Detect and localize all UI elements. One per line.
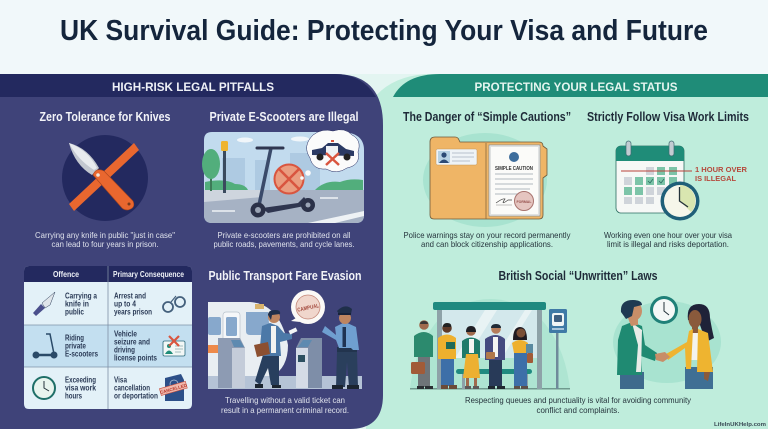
icon: crossed-out knife xyxy=(62,135,148,221)
scooter xyxy=(250,148,315,218)
row: visa hours: or deportation xyxy=(114,392,158,400)
row: knife xyxy=(33,292,185,316)
table header: Primary Consequence xyxy=(113,270,184,279)
row: knife: years prison xyxy=(114,308,152,316)
row: e-scooters: Riding xyxy=(65,334,84,342)
callout: one hour over: IS ILLEGAL xyxy=(695,174,736,183)
table header: Offence xyxy=(53,270,79,279)
row: e-scooters: Vehicle xyxy=(114,330,137,338)
section header: protecting your legal status xyxy=(393,74,768,97)
text: social laws xyxy=(465,395,692,415)
row: knife: up to 4 xyxy=(114,300,136,308)
person: passenger with bag xyxy=(254,310,297,388)
text: fare evasion: result in a permanent criminal record. xyxy=(221,405,349,415)
icon: wall clock xyxy=(650,296,678,324)
heading: fare evasion: Public Transport Fare Evasion xyxy=(208,269,362,283)
row: e-scooters: E-scooters xyxy=(65,350,98,358)
text: e-scooters xyxy=(214,230,354,249)
person 3 xyxy=(462,326,480,389)
text: visa limits: limit is illegal and risks deportation. xyxy=(607,239,729,249)
row: e-scooters: seizure and xyxy=(114,338,150,346)
heading: simple cautions: The Danger of “Simple Cautions” xyxy=(403,110,571,124)
person 1 xyxy=(411,320,433,389)
person: man in green jacket xyxy=(617,300,657,389)
row: visa hours: CANCELLED xyxy=(159,382,188,395)
illustration: caution folder: SIMPLE CAUTION xyxy=(495,166,533,172)
heading: e-scooters: Private E-Scooters are Illegal xyxy=(210,110,358,124)
panel: high-risk legal pitfalls xyxy=(0,74,383,429)
callout: one hour over: 1 HOUR OVER xyxy=(695,165,748,174)
row: e-scooters: license points xyxy=(114,354,157,362)
speech bubble: stamp xyxy=(291,290,325,324)
row: visa hours: Visa xyxy=(114,376,127,384)
text: fare evasion: Travelling without a valid ticket can xyxy=(225,395,345,405)
text: simple cautions xyxy=(404,230,571,249)
person 2 xyxy=(438,323,457,389)
row: visa hours: visa work xyxy=(65,384,96,392)
panel: protecting your legal status xyxy=(366,74,768,429)
text: social laws: conflict and complaints. xyxy=(536,405,620,415)
heading: unwritten laws: British Social “Unwritten” Laws xyxy=(498,269,658,283)
row: visa hours: cancellation xyxy=(114,384,150,392)
text: knives: can lead to four years in prison. xyxy=(52,239,158,249)
row: knife: Carrying a xyxy=(65,292,97,300)
section header: high-risk legal pitfalls xyxy=(0,74,376,97)
section header: protecting your legal status: PROTECTING YOUR LEGAL STATUS xyxy=(474,82,678,94)
watermark: LifeInUKHelp.com xyxy=(714,422,766,428)
text: e-scooters: Private e-scooters are prohibited on all xyxy=(218,230,351,240)
text: visa limits: Working even one hour over your visa xyxy=(604,230,732,240)
row: e-scooters xyxy=(32,330,185,362)
row: visa hours: Exceeding xyxy=(65,376,96,384)
table: offence and consequence xyxy=(24,266,192,409)
illustration: caution folder xyxy=(423,133,547,227)
row: visa hours xyxy=(33,374,188,401)
ticket gate right xyxy=(296,338,322,388)
text: social laws: Respecting queues and punctuality is vital for avoiding community xyxy=(465,395,692,405)
person: police officer xyxy=(322,306,359,389)
illustration: bus stop queue xyxy=(410,299,570,390)
illustration: caution folder: FORMAL xyxy=(517,200,532,204)
person: woman in yellow jacket xyxy=(666,304,714,389)
text: simple cautions: and can block citizenship applications. xyxy=(421,239,553,249)
heading: knives: Zero Tolerance for Knives xyxy=(40,110,171,124)
text: visa limits xyxy=(604,230,732,249)
icon: handshake xyxy=(655,352,670,362)
illustration: calendar and clock xyxy=(616,141,700,220)
person 4 xyxy=(485,324,505,389)
illustration: e-scooter scene xyxy=(202,130,364,223)
ticket gate left xyxy=(218,338,245,388)
section header: high-risk legal pitfalls: HIGH-RISK LEGAL PITFALLS xyxy=(112,82,274,94)
speech bubble: stamp: CAMPUAL xyxy=(297,303,320,314)
row: e-scooters: private xyxy=(65,342,86,350)
row: knife: Arrest and xyxy=(114,292,146,300)
illustration: handshake with clock xyxy=(613,296,721,389)
text: knives xyxy=(35,230,175,249)
prohibited sign xyxy=(274,164,304,194)
thought bubble: police car xyxy=(300,130,359,180)
text: fare evasion xyxy=(221,395,349,415)
tree xyxy=(202,149,220,191)
text: simple cautions: Police warnings stay on your record permanently xyxy=(404,230,571,240)
text: e-scooters: public roads, pavements, and cycle lanes. xyxy=(214,239,354,249)
row: knife: public xyxy=(65,308,84,316)
title: UK Survival Guide: Protecting Your Visa and Future xyxy=(60,15,708,47)
train xyxy=(208,302,288,376)
row: visa hours: hours xyxy=(65,392,82,400)
row: knife: knife in xyxy=(65,300,89,308)
table header xyxy=(53,270,184,279)
text: knives: Carrying any knife in public "just in case" xyxy=(35,230,175,240)
street lamp xyxy=(221,141,228,193)
callout: one hour over xyxy=(695,165,748,183)
person 5 xyxy=(512,327,533,389)
row: e-scooters: driving xyxy=(114,346,135,354)
illustration: fare evasion xyxy=(208,290,362,389)
